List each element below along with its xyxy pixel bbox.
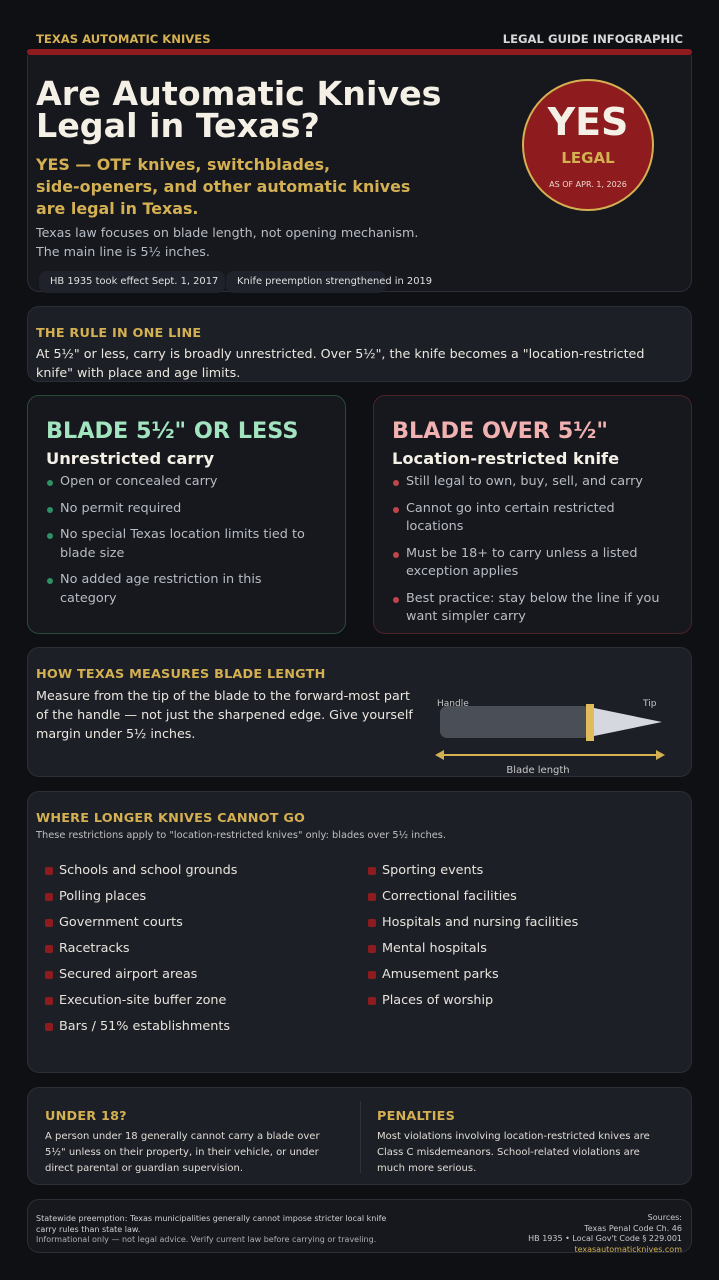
- footer notes: [36, 1214, 386, 1244]
- sources: Texas Penal Code Ch. 46: [584, 1224, 682, 1232]
- under 18: UNDER 18?: [45, 1109, 127, 1124]
- location list left: Bars / 51% establishments: [59, 1019, 230, 1034]
- badge: YES legal: AS OF APR. 1, 2026: [549, 180, 627, 189]
- badge: YES legal: YES: [548, 100, 628, 144]
- heading: THE RULE IN ONE LINE: [36, 326, 201, 341]
- rule text: knife" with place and age limits.: [36, 364, 240, 380]
- heading green: BLADE 5½" OR LESS: [46, 418, 298, 444]
- panel: where longer knives cannot go: [27, 791, 692, 1073]
- panel: hero: [27, 55, 692, 292]
- intro text: Texas law focuses on blade length, not opening mechanism.: [36, 225, 418, 240]
- note: These restrictions apply to "location-restricted knives" only: blades over 5½ inches.: [36, 830, 446, 841]
- list: Still legal to own, buy, sell, and carry: [406, 474, 643, 489]
- penalties: [377, 1109, 650, 1174]
- title: Legal in Texas?: [36, 106, 320, 145]
- heading pink: BLADE OVER 5½": [392, 418, 608, 444]
- panel: rule in one line: [27, 306, 692, 382]
- chip 1: HB 1935 took effect Sept. 1, 2017: [50, 276, 218, 287]
- location list right: Amusement parks: [382, 967, 499, 982]
- sources: texasautomaticknives.com: [574, 1244, 682, 1254]
- panel: measure blade: [27, 647, 692, 777]
- list: Must be 18+ to carry unless a listed exception applies: [406, 546, 638, 579]
- location list left: Execution-site buffer zone: [59, 993, 226, 1008]
- list: No added age restriction in this category: [60, 572, 262, 606]
- sources: HB 1935 • Local Gov't Code § 229.001: [528, 1234, 682, 1243]
- chip 1: [39, 271, 225, 293]
- location list right: Correctional facilities: [382, 889, 517, 904]
- subtitle: [36, 155, 410, 218]
- list: [47, 474, 305, 606]
- location list left: [45, 863, 237, 1034]
- location list left: Polling places: [59, 889, 146, 904]
- knife diagram: Tip: [642, 699, 657, 709]
- location list left: Schools and school grounds: [59, 863, 237, 878]
- header: label: LEGAL GUIDE INFOGRAPHIC: [503, 32, 683, 46]
- intro text: The main line is 5½ inches.: [36, 244, 210, 259]
- location list right: Mental hospitals: [382, 941, 487, 956]
- badge: YES legal: LEGAL: [561, 149, 615, 167]
- location list left: Government courts: [59, 915, 183, 930]
- knife diagram: Blade length: [506, 765, 570, 776]
- location list right: Places of worship: [382, 993, 493, 1008]
- heading: WHERE LONGER KNIVES CANNOT GO: [36, 811, 305, 826]
- location list left: Secured airport areas: [59, 967, 197, 982]
- list: [393, 474, 659, 624]
- penalties: Most violations involving location-restricted knives are Class C misdemeanors. School-related violations are much more serious.: [377, 1131, 650, 1174]
- footer: [27, 1199, 692, 1253]
- panel: blade 5.5 or less: [27, 395, 346, 634]
- rule text: At 5½" or less, carry is broadly unrestricted. Over 5½", the knife becomes a "location-restricted: [36, 346, 644, 361]
- title: [36, 74, 441, 145]
- sources: [528, 1213, 682, 1254]
- header: brand: TEXAS AUTOMATIC KNIVES: [36, 32, 211, 46]
- chip 2: [226, 271, 386, 293]
- rule text: [36, 346, 644, 380]
- badge: YES legal: [522, 79, 654, 211]
- subtitle: are legal in Texas.: [36, 199, 198, 218]
- sources: Sources:: [648, 1213, 682, 1222]
- under 18: A person under 18 generally cannot carry a blade over 5½" unless on their property, in their vehicle, or under direct parental or guardian supervision.: [45, 1131, 320, 1174]
- panel: blade over 5.5: [373, 395, 692, 634]
- subtitle: side-openers, and other automatic knives: [36, 177, 410, 196]
- subheading: Location-restricted knife: [392, 449, 619, 468]
- panel: under 18 and penalties: [27, 1087, 692, 1185]
- chip 2: Knife preemption strengthened in 2019: [237, 276, 432, 287]
- location list right: Sporting events: [382, 863, 483, 878]
- location list right: [368, 863, 578, 1008]
- footer notes: Statewide preemption: Texas municipalities generally cannot impose stricter local knife carry rules than state law.: [36, 1214, 386, 1234]
- intro text: [36, 225, 418, 259]
- location list right: Hospitals and nursing facilities: [382, 915, 578, 930]
- list: No special Texas location limits tied to blade size: [60, 527, 305, 560]
- knife diagram: Handle: [437, 699, 469, 709]
- list: No permit required: [60, 500, 181, 516]
- list: Best practice: stay below the line if you want simpler carry: [406, 590, 659, 624]
- measure text: Measure from the tip of the blade to the forward-most part of the handle — not just the sharpened edge. Give yourself margin under 5½ inches.: [36, 688, 413, 741]
- title: Are Automatic Knives: [36, 74, 441, 113]
- subtitle: YES — OTF knives, switchblades,: [36, 155, 330, 174]
- red bar: [27, 49, 692, 55]
- footer notes: Informational only — not legal advice. Verify current law before carrying or traveling.: [36, 1235, 376, 1244]
- penalties: PENALTIES: [377, 1109, 455, 1124]
- under 18: [45, 1109, 320, 1174]
- heading: HOW TEXAS MEASURES BLADE LENGTH: [36, 667, 325, 682]
- subheading: Unrestricted carry: [46, 449, 214, 468]
- location list left: Racetracks: [59, 941, 130, 956]
- list: Open or concealed carry: [60, 474, 218, 489]
- list: Cannot go into certain restricted locations: [406, 500, 615, 534]
- knife diagram: [435, 699, 665, 776]
